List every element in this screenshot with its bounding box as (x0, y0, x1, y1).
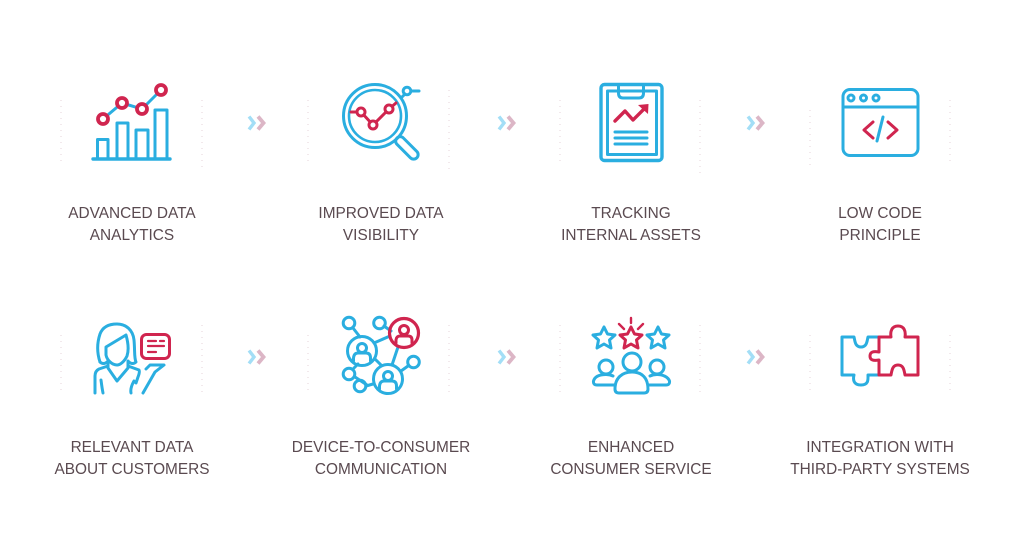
arrow: row 1 third (748, 116, 762, 130)
arrow: row 2 first (249, 350, 264, 364)
heading: row 2 labels: ABOUT CUSTOMERS (54, 461, 210, 478)
heading: row 2 labels: INTEGRATION WITH (806, 439, 954, 456)
heading: row 1 labels: LOW CODE (838, 205, 922, 222)
heading: row 2 labels (54, 439, 970, 478)
heading: row 1 labels: PRINCIPLE (839, 227, 921, 244)
arrow: row 2 third (748, 350, 762, 364)
icon: magnifier with chart (344, 84, 420, 161)
heading: row 2 labels: RELEVANT DATA (71, 439, 194, 456)
heading: row 2 labels: DEVICE-TO-CONSUMER (292, 439, 470, 456)
heading: row 1 labels: TRACKING (591, 205, 671, 222)
icon: connected consumer network (343, 317, 419, 394)
icon: clipboard with rising arrow (601, 84, 662, 160)
heading: row 1 labels (68, 205, 922, 244)
icon: bar chart with trend line (93, 85, 170, 159)
icon: people with stars (593, 318, 670, 393)
heading: row 2 labels: THIRD-PARTY SYSTEMS (790, 461, 970, 478)
arrow: row 1 second (499, 116, 514, 130)
icon: puzzle pieces (842, 326, 918, 385)
heading: row 1 labels: INTERNAL ASSETS (561, 227, 701, 244)
arrow: row 1 first (249, 116, 264, 130)
heading: row 1 labels: IMPROVED DATA (318, 205, 444, 222)
heading: row 1 labels: ANALYTICS (90, 227, 174, 244)
heading: row 2 labels: COMMUNICATION (315, 461, 447, 478)
heading: row 1 labels: VISIBILITY (343, 227, 419, 244)
heading: row 2 labels: ENHANCED (588, 439, 674, 456)
heading: row 1 labels: ADVANCED DATA (68, 205, 196, 222)
arrow: row 2 second (499, 350, 514, 364)
icon: woman with message card (95, 324, 170, 393)
heading: row 2 labels: CONSUMER SERVICE (550, 461, 712, 478)
icon: browser window with code (843, 90, 918, 156)
